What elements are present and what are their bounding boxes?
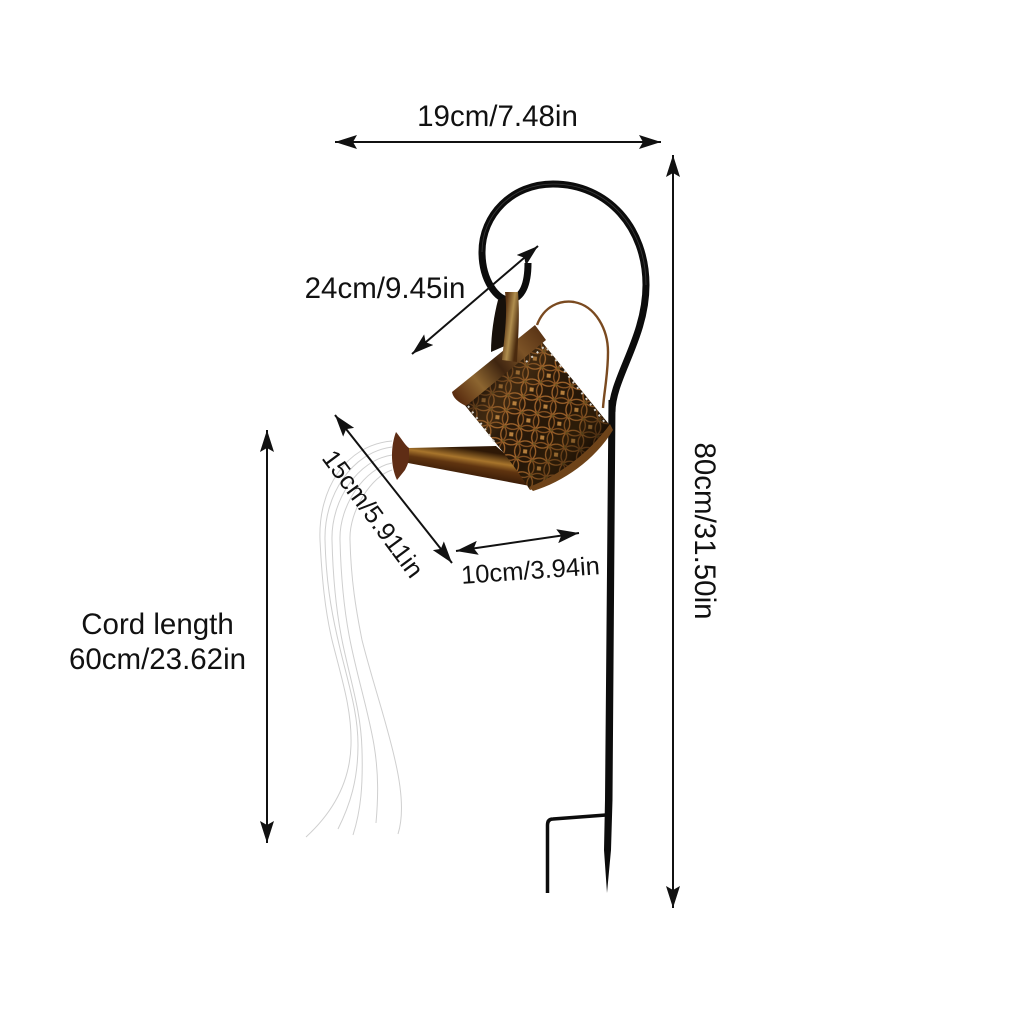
stake fork (548, 815, 606, 893)
perforation dots (468, 346, 606, 444)
front handle band (502, 292, 519, 362)
label: cord length: 60cm/23.62in (69, 643, 246, 676)
bottom rim (529, 424, 613, 491)
label: cord length: Cord length (81, 608, 234, 641)
top rim (452, 325, 546, 406)
label: spout: 15cm/5.911in (316, 445, 429, 583)
arrow: width 19cm (335, 141, 661, 143)
arrow: spout 15cm (335, 415, 452, 563)
spout (408, 446, 530, 486)
can body (464, 342, 612, 490)
arrow: cord length (266, 430, 268, 843)
light cords (306, 441, 402, 837)
label: can length: 24cm/9.45in (305, 272, 465, 305)
top handle arc (537, 302, 608, 408)
arrow: can length 24cm (412, 246, 538, 354)
handle back strap (491, 296, 508, 352)
label: height: 80cm/31.50in (688, 442, 721, 620)
body shading (464, 342, 612, 490)
label: width: 19cm/7.48in (417, 100, 578, 133)
arrow: height 80cm (672, 155, 674, 908)
stake pole (604, 400, 616, 893)
watering can (392, 292, 613, 491)
shepherd hook (482, 184, 646, 412)
shower head (392, 432, 409, 480)
arrow: can diameter 10cm (456, 533, 579, 551)
label: can diameter: 10cm/3.94in (460, 552, 601, 590)
